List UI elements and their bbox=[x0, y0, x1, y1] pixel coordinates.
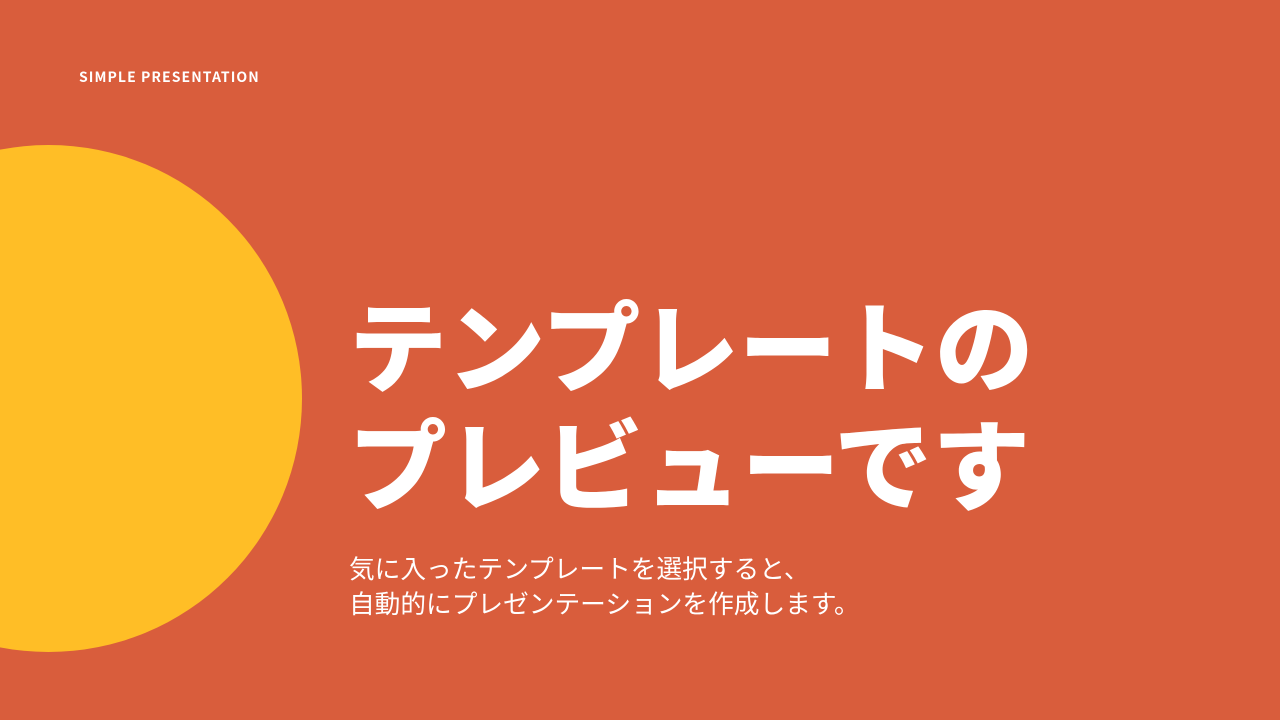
decorative yellow circle bbox=[0, 145, 302, 652]
title: テンプレートの bbox=[349, 271, 1033, 413]
subtitle text: 気に入ったテンプレートを選択すると、 bbox=[349, 549, 810, 586]
subtitle text: 自動的にプレゼンテーションを作成します。 bbox=[349, 584, 860, 621]
title: プレビューです bbox=[349, 389, 1031, 531]
title bbox=[349, 271, 1033, 531]
subtitle text bbox=[349, 549, 860, 621]
eyebrow label: SIMPLE PRESENTATION bbox=[79, 67, 260, 87]
